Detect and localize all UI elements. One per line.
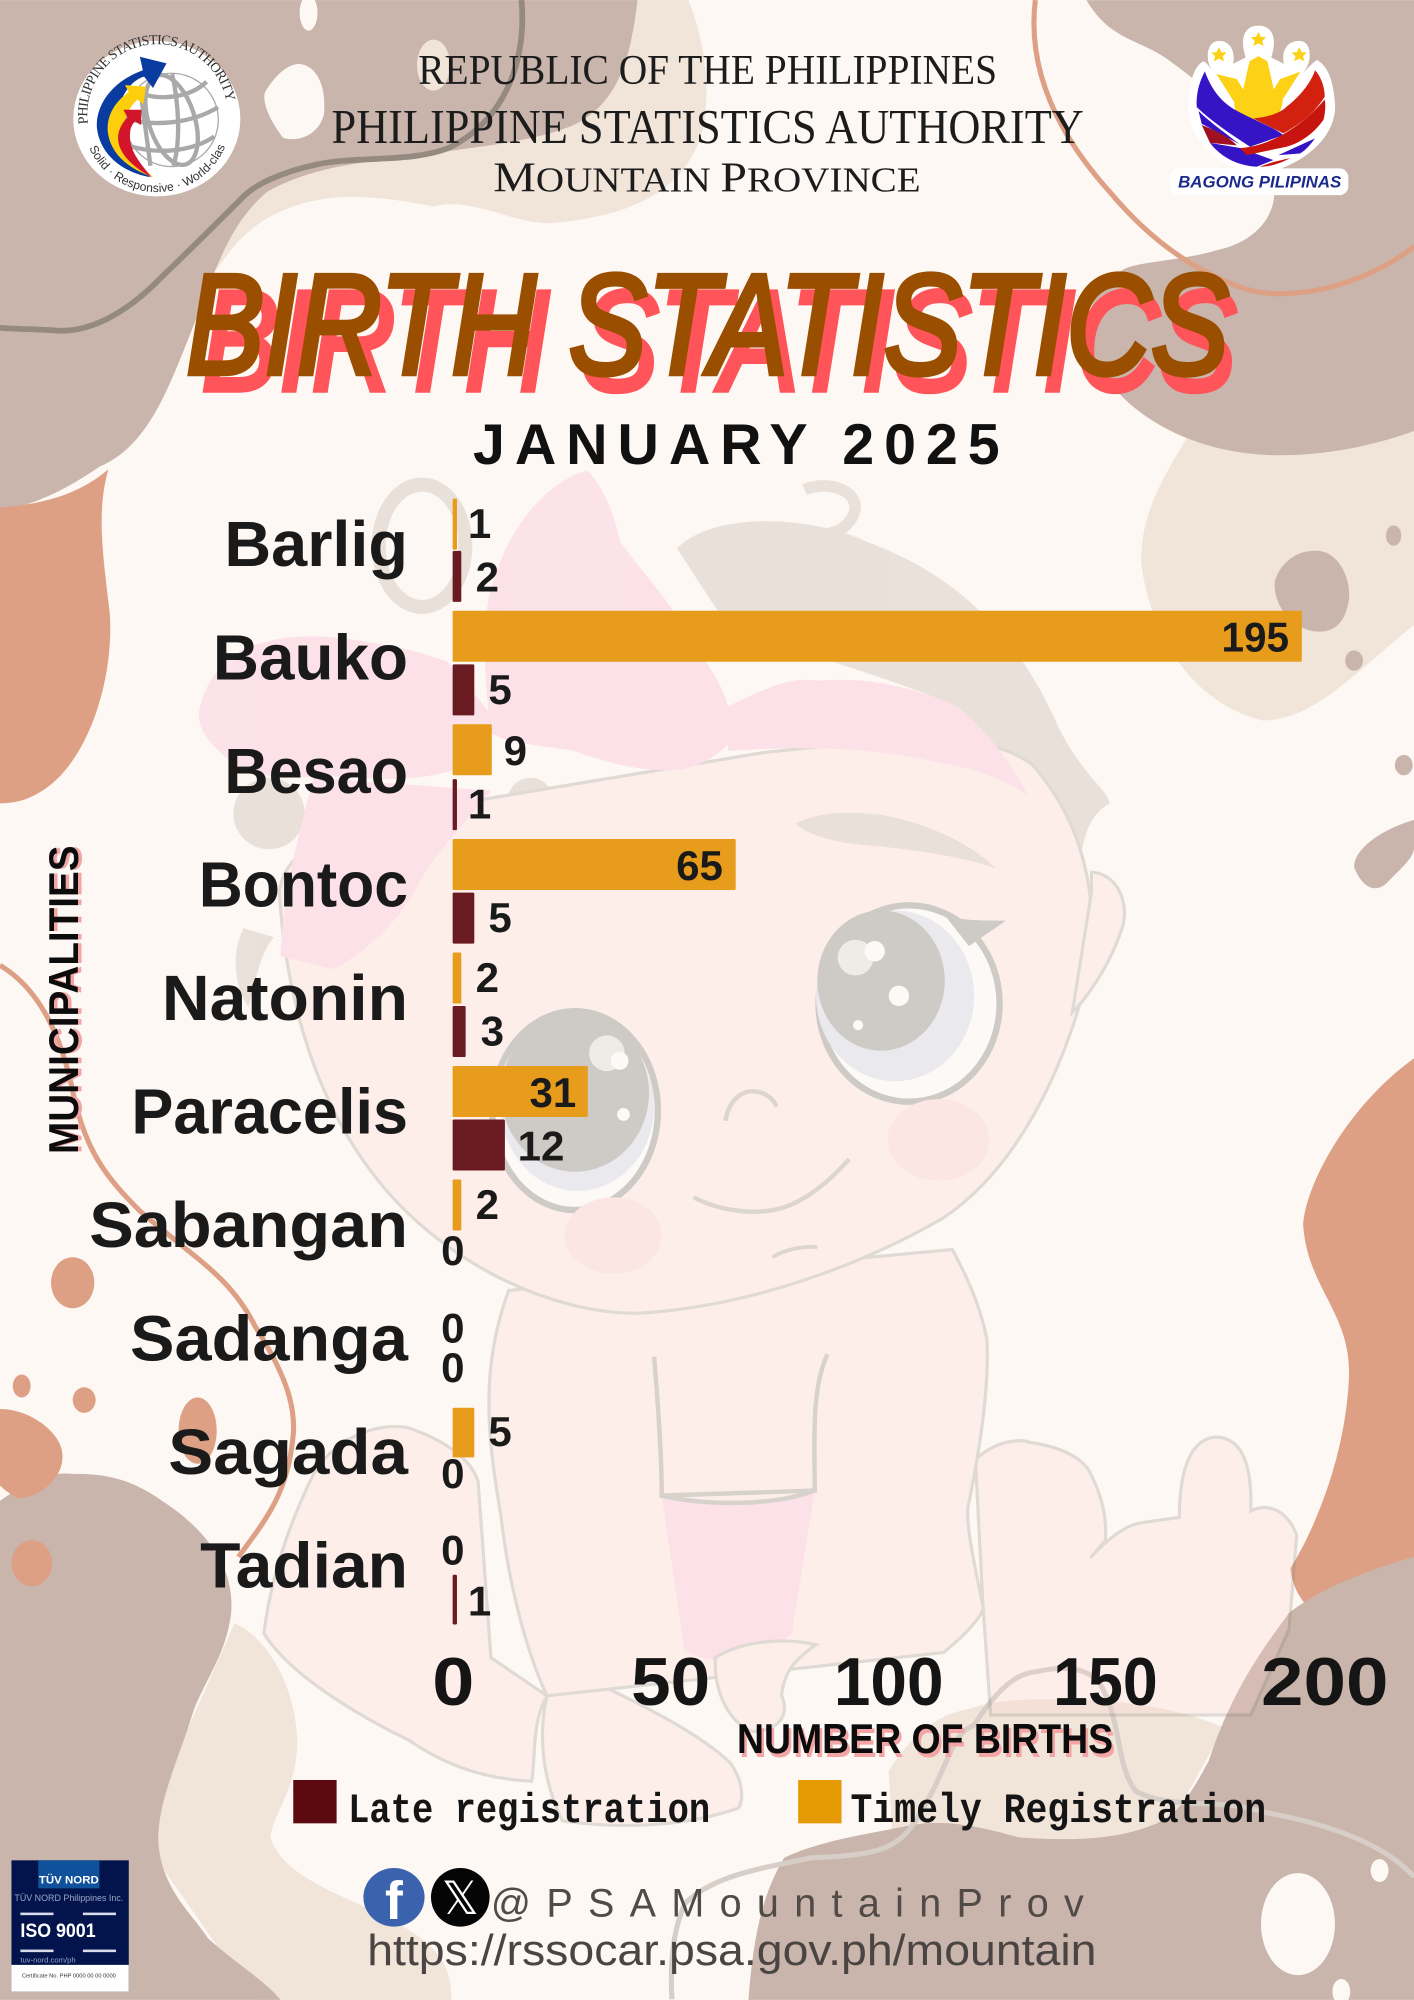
municipality labels: Paracelis xyxy=(131,1076,408,1148)
bar value labels: 1 xyxy=(468,500,491,547)
seal blue arrow xyxy=(97,57,167,177)
baby diaper xyxy=(662,1491,815,1660)
bar value labels: 1 xyxy=(468,781,491,828)
x axis tick labels: 150 xyxy=(1053,1645,1158,1720)
baby hair loops xyxy=(379,485,855,607)
municipality labels: Natonin xyxy=(162,962,408,1034)
badge: ISO 9001 certification xyxy=(11,1860,129,1992)
x axis tick labels xyxy=(432,1645,1388,1720)
municipality labels: Sabangan xyxy=(89,1189,408,1261)
bar value labels: 2 xyxy=(476,1181,499,1228)
baby hands and legs xyxy=(264,1427,1297,1825)
logo: Philippine Statistics Authority seal xyxy=(73,34,240,196)
axis title: number of births: NUMBER OF BIRTHS xyxy=(740,1719,1116,1766)
bar value labels: 3 xyxy=(481,1008,504,1055)
x axis tick labels: 100 xyxy=(834,1645,944,1720)
bar chart xyxy=(441,499,1302,1625)
logo sun xyxy=(1216,56,1301,125)
badge: ISO 9001 certification: tuv-nord.com/ph xyxy=(20,1955,76,1964)
baby right eye xyxy=(816,905,1006,1102)
icon: Facebook xyxy=(363,1868,425,1931)
axis title: number of births: NUMBER OF BIRTHS xyxy=(737,1715,1113,1762)
seal yellow arrow xyxy=(108,85,153,177)
logo label xyxy=(1170,168,1348,195)
bar value labels: 0 xyxy=(441,1305,465,1352)
bar value labels: 31 xyxy=(530,1069,576,1116)
timely registration bars xyxy=(453,499,1302,1457)
bar value labels: 1 xyxy=(468,1578,491,1625)
baby left eye xyxy=(492,1011,658,1210)
bar value labels: 12 xyxy=(518,1122,564,1169)
logo red ribbons xyxy=(1253,70,1325,133)
bar value labels: 9 xyxy=(504,727,527,774)
baby arm creases xyxy=(654,1354,827,1503)
bar value labels: 0 xyxy=(441,1344,465,1391)
logo stars xyxy=(1211,47,1227,61)
website url: https://rssocar.psa.gov.ph/mountain xyxy=(367,1927,1097,1975)
bar value labels: 5 xyxy=(488,666,512,713)
municipality labels: Sadanga xyxy=(130,1303,409,1375)
title: BIRTH STATISTICS xyxy=(186,246,1237,421)
agency line: PHILIPPINE STATISTICS AUTHORITY xyxy=(332,101,1084,154)
seal globe xyxy=(125,68,218,171)
badge: ISO 9001 certification: TÜV NORD xyxy=(39,1873,99,1886)
social handle: @PSAMountainProv xyxy=(491,1881,1084,1925)
icon: Facebook: f xyxy=(385,1872,403,1931)
bar value labels: 2 xyxy=(476,954,499,1001)
legend: timely registration xyxy=(798,1780,1266,1835)
bar value labels: 195 xyxy=(1221,614,1289,661)
badge: ISO 9001 certification: ISO 9001 xyxy=(20,1921,96,1942)
legend: late registration: Late registration xyxy=(348,1787,710,1835)
x axis tick labels: 50 xyxy=(631,1645,710,1720)
baby ear xyxy=(1072,872,1124,1012)
baby torso xyxy=(489,1250,987,1696)
baby nose, mouth and cheeks xyxy=(565,1091,989,1274)
subtitle: January 2025: JANUARY 2025 xyxy=(473,413,1000,477)
bar value labels: 5 xyxy=(488,894,512,941)
municipality labels: Besao xyxy=(224,735,408,807)
bar value labels: 2 xyxy=(476,554,499,601)
municipality labels: Sagada xyxy=(168,1416,409,1488)
seal red arrow xyxy=(118,110,152,177)
baby face xyxy=(279,740,1092,1313)
bar value labels: 0 xyxy=(441,1227,465,1274)
municipality labels: Bontoc xyxy=(199,849,408,921)
header text block xyxy=(332,48,1084,201)
seal ring text: PHILIPPINE STATISTICS AUTHORITY xyxy=(78,34,236,124)
late registration bars xyxy=(453,551,505,1624)
badge: ISO 9001 certification: TÜV NORD Philippines Inc. xyxy=(14,1893,123,1903)
icon: X: 𝕏 xyxy=(442,1872,479,1924)
x axis tick labels: 200 xyxy=(1261,1645,1388,1720)
bar value labels: 5 xyxy=(488,1408,512,1455)
badge: ISO 9001 certification: Certificate No. PHP 0000 00 00 0000 xyxy=(22,1974,116,1980)
municipality labels: Tadian xyxy=(200,1529,408,1601)
municipality labels xyxy=(89,508,409,1601)
logo: Bagong Pilipinas xyxy=(1170,26,1348,195)
legend xyxy=(293,1780,1266,1835)
legend: timely registration: Timely Registration xyxy=(850,1787,1266,1835)
republic line: REPUBLIC OF THE PHILIPPINES xyxy=(418,48,997,94)
baby hand xyxy=(715,1641,816,1732)
x axis tick labels: 0 xyxy=(432,1645,474,1720)
bar value labels: 0 xyxy=(441,1450,465,1497)
province line: MOUNTAIN PROVINCE xyxy=(493,155,921,201)
axis title: municipalities: MUNICIPALITIES xyxy=(40,845,87,1154)
logo blue ribbon xyxy=(1197,71,1283,147)
bar value labels: 65 xyxy=(676,842,723,889)
municipality labels: Bauko xyxy=(213,622,408,694)
icon: X xyxy=(431,1868,490,1927)
logo wordmark: BAGONG PILIPINAS xyxy=(1178,172,1341,191)
baby eyebrow xyxy=(796,813,996,868)
watermark: baby illustration xyxy=(199,471,1297,1825)
bar value labels: 0 xyxy=(441,1527,465,1574)
municipality labels: Barlig xyxy=(224,508,408,580)
axis title: municipalities: MUNICIPALITIES xyxy=(44,845,91,1154)
baby hair xyxy=(233,521,1109,1011)
baby bow and headband xyxy=(199,471,1028,969)
bar value labels xyxy=(441,500,1289,1625)
legend: late registration xyxy=(293,1780,710,1835)
